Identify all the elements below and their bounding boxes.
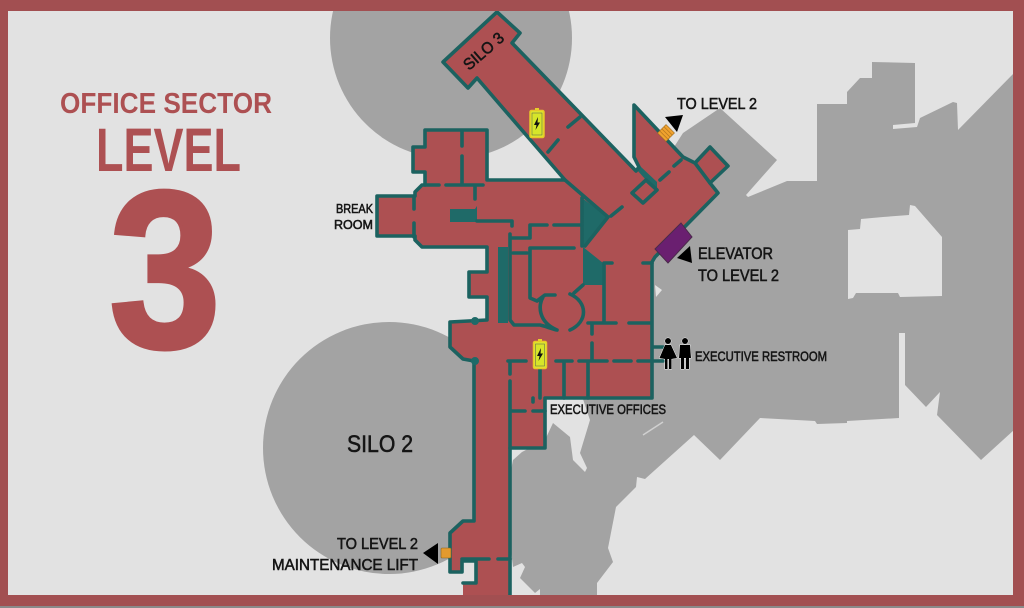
label: break room: ROOM — [334, 218, 373, 232]
label: maintenance lift: MAINTENANCE LIFT — [272, 557, 418, 574]
teal service areas — [450, 166, 657, 323]
silo 3 circle — [330, 0, 572, 159]
label: to level 2 top: TO LEVEL 2 — [677, 96, 757, 113]
battery bottom — [534, 339, 546, 368]
label: break room: BREAK — [336, 202, 374, 216]
label: elevator — [698, 245, 779, 285]
closet room — [632, 180, 657, 203]
title: LEVEL — [96, 116, 241, 184]
gray background building — [505, 62, 1014, 596]
light streaks in gray area — [643, 422, 663, 435]
label: elevator: ELEVATOR — [698, 245, 773, 263]
label: executive restroom: EXECUTIVE RESTROOM — [695, 349, 827, 364]
label: maintenance lift: TO LEVEL 2 — [337, 536, 418, 553]
interior walls — [414, 117, 710, 559]
arrow: maintenance lift — [423, 543, 438, 564]
floor fill — [377, 12, 728, 596]
arrow: stairs top — [665, 115, 683, 132]
label: silo 3: SILO 3 — [460, 30, 508, 74]
label: elevator: TO LEVEL 2 — [698, 267, 779, 285]
title: OFFICE SECTOR — [60, 88, 272, 120]
stairs top — [658, 125, 674, 141]
stairs bottom — [441, 548, 451, 558]
wall junction blobs — [471, 317, 479, 365]
outer walls — [377, 12, 728, 596]
label: break room — [334, 202, 374, 232]
floor plan — [377, 12, 728, 596]
title: 3 — [109, 145, 221, 395]
title — [60, 88, 272, 395]
label: maintenance lift — [272, 536, 418, 574]
icon: restroom woman — [660, 338, 677, 369]
elevator — [655, 223, 692, 263]
icon: restroom man — [679, 338, 691, 369]
silo 2 circle — [263, 322, 472, 574]
label: executive offices: EXECUTIVE OFFICES — [550, 402, 666, 417]
small light notch — [655, 285, 662, 297]
label: silo 2: SILO 2 — [347, 431, 413, 458]
arrow: elevator — [677, 246, 692, 263]
battery top — [530, 108, 544, 138]
